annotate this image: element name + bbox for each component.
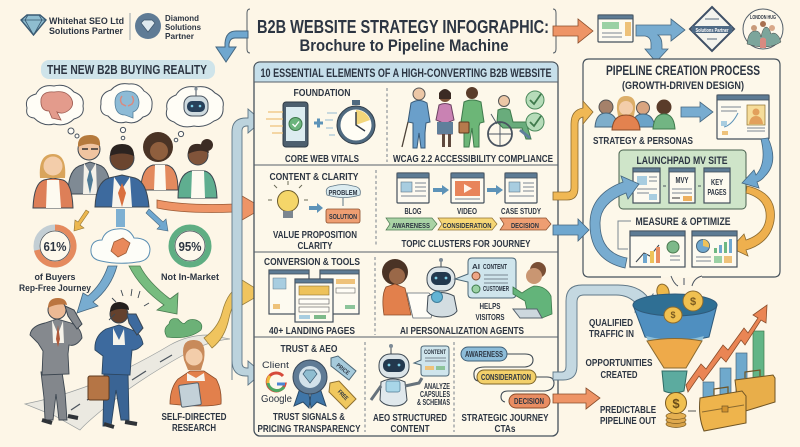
- measure and optimize: [618, 216, 737, 267]
- arrow: blue split right and down: [636, 19, 685, 62]
- pipe: blue-grey to funnel: [553, 285, 655, 380]
- arrow: title to buying reality: [216, 31, 248, 62]
- label: opportunities created: OPPORTUNITIES: [586, 357, 652, 369]
- label: predictable pipeline out: [600, 404, 656, 427]
- funnel graphic: $: [670, 310, 676, 320]
- label: self-directed research: SELF-DIRECTED: [162, 412, 226, 423]
- section: strategic journey CTAs: CONSIDERATION: [481, 373, 531, 382]
- panel heading: (GROWTH-DRIVEN DESIGN): [622, 80, 744, 92]
- section: foundation: [266, 87, 375, 165]
- person: woman with tablet: [170, 340, 221, 407]
- badge: London HUG: [743, 9, 783, 49]
- label: qualified traffic in: [589, 317, 634, 340]
- section: AEO structured content: ANALYZE: [424, 382, 450, 391]
- section: content and clarity: CLARITY: [298, 240, 332, 252]
- coins: [655, 283, 671, 301]
- section: content and clarity: [268, 171, 360, 252]
- arrow: orange from title to top-right: [553, 19, 593, 43]
- arrow: yellow from website panel to pipeline panel: [553, 101, 593, 200]
- person: woman with document: [382, 259, 435, 318]
- arrow: launchpad to measure: [731, 186, 774, 256]
- section: conversion and tools: 40+ LANDING PAGES: [269, 325, 355, 337]
- section: AI personalization: [382, 258, 552, 337]
- icon: price tags: PRICE: [335, 363, 350, 377]
- growth chart bars: [703, 331, 764, 398]
- funnel graphic: $: [690, 296, 696, 308]
- donut: 61% of buyers: [19, 227, 92, 294]
- label: qualified traffic in: TRAFFIC IN: [589, 328, 634, 340]
- person in purple top: [436, 89, 454, 147]
- section: AI personalization: VISITORS: [476, 312, 505, 322]
- panel: pipeline creation process: [583, 59, 780, 277]
- person: woman with afro, coral jacket: [141, 132, 178, 190]
- launchpad box: [619, 150, 746, 209]
- section: topic clusters: CONSIDERATION: [442, 221, 492, 230]
- donut: 61% of buyers: of Buyers: [34, 272, 76, 283]
- section: content and clarity: CONTENT & CLARITY: [270, 171, 358, 183]
- section: topic clusters: AWARENESS: [392, 221, 430, 230]
- donut: 95% not in-market: 95%: [178, 239, 202, 254]
- section: conversion and tools: CONVERSION & TOOLS: [264, 256, 360, 268]
- icon: G mark: [267, 373, 285, 391]
- panel heading: [606, 63, 760, 92]
- personas group: STRATEGY & PERSONAS: [593, 135, 693, 147]
- arrow: orange to pipeline out: [553, 388, 600, 409]
- launchpad box: LAUNCHPAD MV SITE: [636, 155, 728, 167]
- chat bubble: CUSTOMER: [483, 286, 509, 293]
- donut: 61% of buyers: 61%: [44, 239, 67, 254]
- section: AI personalization: HELPS: [480, 301, 501, 311]
- label: self-directed research: [162, 412, 226, 434]
- logo: Whitehat SEO partner lockup: Diamond: [165, 13, 199, 23]
- person in wheelchair: [488, 96, 531, 146]
- icon: price tags: [329, 356, 356, 409]
- launchpad box: KEY: [711, 177, 723, 187]
- icon: dollar coin and stack: $: [672, 396, 680, 411]
- funnel graphic: [633, 283, 717, 393]
- label: opportunities created: [586, 357, 652, 381]
- logo: Whitehat SEO partner lockup: Solutions: [165, 22, 201, 32]
- label: predictable pipeline out: PREDICTABLE: [600, 404, 656, 416]
- section: AEO structured content: AEO STRUCTURED: [373, 412, 447, 424]
- road: rep-free path: [25, 335, 230, 430]
- section: topic clusters: CASE STUDY: [501, 206, 541, 216]
- section: trust and AEO: Google: [261, 394, 292, 405]
- arrow: window to launchpad: [742, 138, 773, 188]
- section: trust and AEO: PRICING TRANSPARENCY: [258, 423, 360, 435]
- thought clouds: [26, 84, 223, 142]
- section: accessibility: WCAG 2.2 ACCESSIBILITY COMPLIANCE: [393, 153, 553, 165]
- arrow: blue from website panel to pipeline panel: [553, 219, 589, 241]
- arrow: orange to website panel: [157, 196, 263, 220]
- launchpad box: PAGES: [708, 187, 727, 197]
- person: woman in green at tablet: [513, 262, 552, 318]
- section: strategic journey CTAs: AWARENESS: [465, 350, 503, 359]
- heading: the new B2B buying reality: THE NEW B2B BUYING REALITY: [47, 62, 207, 77]
- personas group: [593, 96, 693, 147]
- section: topic clusters: TOPIC CLUSTERS FOR JOURNEY: [402, 238, 530, 250]
- measure and optimize: MEASURE & OPTIMIZE: [636, 216, 730, 228]
- chat bubble: AI: [472, 262, 480, 271]
- icon: dollar coin and stack: [666, 392, 696, 428]
- person: grey suit with glasses: [68, 135, 111, 194]
- donut: 95% not in-market: [161, 228, 220, 283]
- person: woman with bun, green blazer: [178, 139, 217, 198]
- icon: award badge: [293, 360, 327, 408]
- logo: Whitehat SEO partner lockup: Whitehat SEO Ltd: [49, 16, 124, 27]
- section: trust and AEO: TRUST SIGNALS &: [273, 411, 345, 423]
- label: self-directed research: RESEARCH: [172, 423, 216, 434]
- launchpad box: MVY: [676, 175, 689, 185]
- person: central man, navy suit: [95, 144, 149, 207]
- analytics window: [692, 231, 737, 267]
- section: AEO structured content: [371, 344, 450, 435]
- section: conversion and tools: [264, 256, 360, 337]
- speech bubble: content: CONTENT: [424, 349, 446, 356]
- section: trust and AEO: TRUST & AEO: [280, 343, 338, 355]
- dashboard window: [630, 231, 685, 267]
- icon: browser window, top right: [598, 15, 633, 42]
- donut: 61% of buyers: Rep-Free Journey: [19, 283, 92, 294]
- section: content and clarity: PROBLEM: [328, 188, 358, 197]
- title: [247, 9, 556, 55]
- badge: solutions partner diamond: [690, 7, 734, 51]
- badge: London HUG: LONDON HUG: [750, 15, 776, 21]
- arrow: personas to window: [681, 102, 713, 122]
- section: accessibility: [393, 87, 553, 165]
- section: topic clusters: BLOG: [404, 206, 422, 216]
- section: foundation: CORE WEB VITALS: [285, 153, 359, 165]
- person: stressed man in navy suit with briefcase: [88, 289, 149, 427]
- heading: the new B2B buying reality: [41, 60, 215, 79]
- section: topic clusters: [386, 173, 551, 250]
- person: blonde woman, coral jacket: [33, 154, 73, 208]
- chat bubble: [455, 258, 516, 298]
- people group: buyers: [33, 132, 217, 208]
- section: content and clarity: VALUE PROPOSITION: [273, 229, 357, 241]
- cloud: brain circuit: [101, 84, 152, 140]
- chat bubble: CONTENT: [483, 262, 507, 271]
- section: content and clarity: SOLUTION: [329, 212, 357, 221]
- robot: [371, 344, 422, 406]
- panel heading: 10 ESSENTIAL ELEMENTS OF A HIGH-CONVERTING B2B WEBSITE: [260, 68, 552, 80]
- arrow: growth zigzag: [686, 305, 767, 392]
- cloud: robot: [166, 87, 223, 142]
- motion strokes above funnel: [671, 276, 702, 286]
- section: AEO structured content: CAPSULES: [420, 390, 450, 399]
- donut: 95% not in-market: Not In-Market: [161, 272, 220, 283]
- section: strategic journey CTAs: [461, 347, 554, 435]
- label: opportunities created: CREATED: [600, 369, 638, 381]
- label: predictable pipeline out: PIPELINE OUT: [600, 415, 656, 427]
- section: AEO structured content: CONTENT: [390, 423, 430, 435]
- section: topic clusters: VIDEO: [457, 206, 477, 216]
- section: foundation: FOUNDATION: [294, 87, 350, 99]
- person in green with bag: [459, 87, 484, 147]
- logo: Whitehat SEO partner lockup: Partner: [165, 31, 195, 41]
- cloud: brain: [26, 85, 83, 138]
- title: Brochure to Pipeline Machine: [300, 36, 508, 55]
- person: stressed man in grey suit: [30, 298, 82, 423]
- arrow: blue, cloud to reps: [77, 266, 117, 313]
- title: B2B WEBSITE STRATEGY INFOGRAPHIC:: [257, 16, 549, 37]
- figure: yellow road to website panel: [204, 280, 263, 348]
- pipe: vertical connector with branch arrows: [232, 109, 262, 385]
- section: strategic journey CTAs: STRATEGIC JOURNEY: [462, 412, 548, 424]
- section: trust and AEO: Client: [262, 360, 289, 371]
- icon: briefcases: [700, 370, 775, 431]
- icon: cloud with fist: [91, 229, 150, 263]
- arrows: group to stats: [74, 209, 168, 231]
- person with cane: [402, 88, 430, 148]
- persona window: [717, 95, 769, 139]
- label: qualified traffic in: QUALIFIED: [589, 317, 633, 329]
- logo: Whitehat SEO partner lockup: [21, 13, 201, 41]
- section: AEO structured content: & SCHEMAS: [417, 398, 450, 407]
- section: trust and AEO: [258, 343, 360, 435]
- section: AI personalization: AI PERSONALIZATION AGENTS: [400, 325, 524, 337]
- section: topic clusters: DECISION: [511, 221, 539, 230]
- icon: price tags: FREE: [336, 389, 349, 402]
- logo: Whitehat SEO partner lockup: Solutions Partner: [49, 26, 123, 37]
- section: strategic journey CTAs: CTAs: [494, 423, 516, 435]
- badge: solutions partner diamond: Solutions Partner: [696, 28, 729, 34]
- icon: green bush: [165, 319, 202, 338]
- arrow: measure back to launchpad: [590, 176, 639, 268]
- section: strategic journey CTAs: DECISION: [514, 397, 544, 406]
- arrow: green, cloud to self-directed: [129, 266, 178, 314]
- panel: 10 essential elements: [254, 62, 558, 436]
- robot assistant: [427, 258, 457, 317]
